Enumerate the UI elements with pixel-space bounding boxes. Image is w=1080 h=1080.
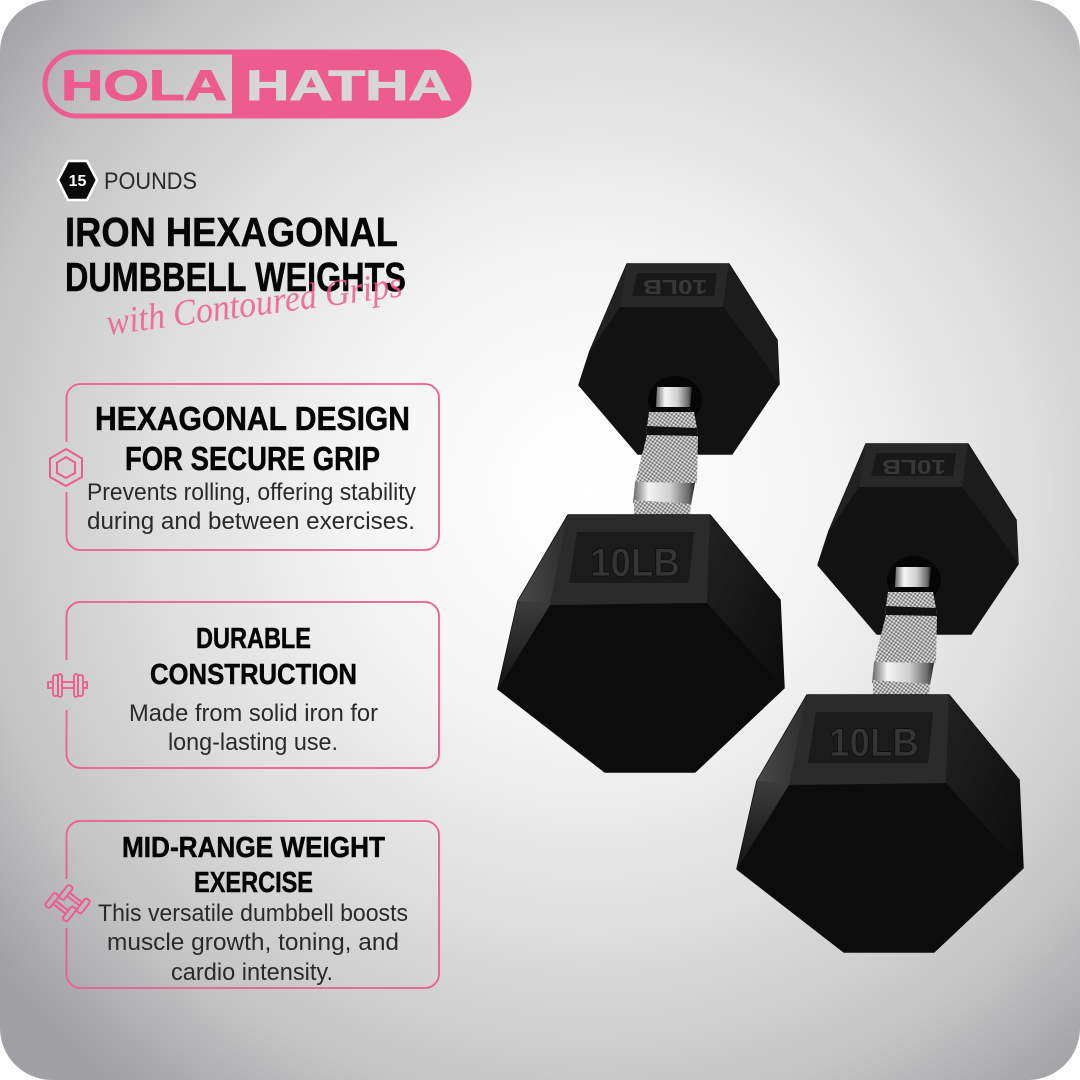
panel: hexagonal design — [50, 384, 439, 550]
panel: mid-range weight exercise: EXERCISE — [194, 867, 313, 899]
dumbbell: right: 10LB — [882, 455, 946, 477]
panel: durable construction: DURABLE — [196, 623, 311, 655]
panel: mid-range weight exercise: muscle growth, toning, and — [107, 929, 399, 956]
logo: Hola Hatha: HOLA — [61, 62, 227, 110]
icon: crossed dumbbells — [45, 884, 91, 922]
logo: Hola Hatha — [45, 50, 471, 118]
panel: mid-range weight exercise: MID-RANGE WEIGHT — [122, 832, 385, 864]
icon: dumbbell — [48, 674, 87, 697]
panel: durable construction: CONSTRUCTION — [150, 659, 357, 691]
dumbbell: right: 10LB — [829, 721, 919, 765]
dumbbell: right — [737, 444, 1023, 952]
panel: mid-range weight exercise — [45, 821, 439, 988]
weight badge: 15 pounds — [58, 161, 197, 200]
panel: hexagonal design: during and between exercises. — [87, 508, 415, 535]
panel: mid-range weight exercise: cardio intensity. — [171, 959, 333, 986]
panel: hexagonal design: FOR SECURE GRIP — [125, 440, 380, 477]
panel: durable construction: Made from solid iron for — [129, 700, 378, 727]
icon: hexagon — [50, 449, 82, 486]
panel: durable construction: long-lasting use. — [168, 729, 338, 756]
panel: hexagonal design: Prevents rolling, offering stability — [87, 479, 416, 506]
weight badge: 15 pounds: POUNDS — [104, 168, 197, 195]
weight badge: 15 pounds: 15 — [69, 173, 86, 190]
title: IRON HEXAGONAL — [65, 209, 398, 255]
title: DUMBBELL WEIGHTS — [65, 254, 406, 300]
dumbbell: left — [498, 264, 784, 772]
dumbbell: left: 10LB — [643, 275, 707, 297]
logo: Hola Hatha: HATHA — [246, 62, 452, 110]
panel: hexagonal design: HEXAGONAL DESIGN — [95, 400, 410, 437]
title — [65, 209, 406, 300]
script subtitle: with Contoured Grips — [104, 264, 405, 344]
panel: mid-range weight exercise: This versatile dumbbell boosts — [98, 900, 408, 927]
panel: durable construction — [48, 602, 439, 768]
dumbbell: left: 10LB — [590, 541, 680, 585]
